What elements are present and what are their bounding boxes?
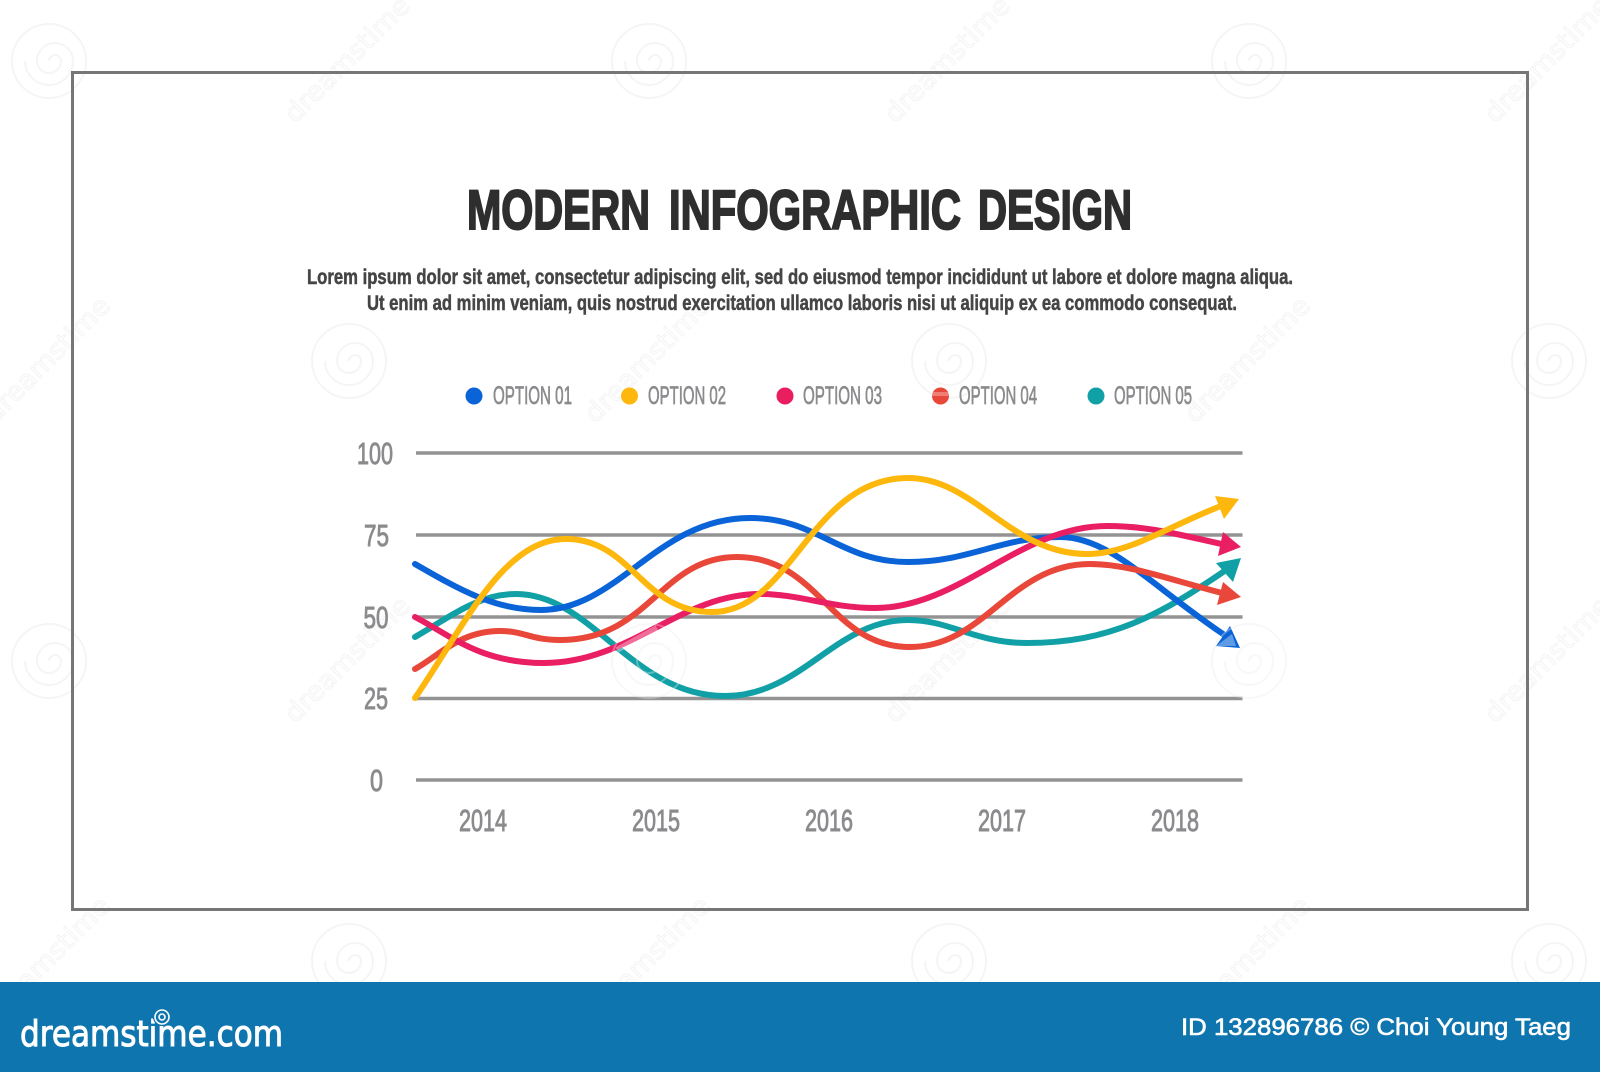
text: dreamstime: [1179, 891, 1317, 1029]
text: dreamstime: [279, 0, 417, 129]
legend item: option 04: OPTION 04: [959, 382, 1037, 410]
y axis labels: 100: [357, 436, 393, 471]
legend item: option 05: OPTION 05: [1114, 382, 1192, 410]
title: DESIGN: [978, 178, 1132, 241]
series: option 04 red line with arrow: [415, 557, 1241, 669]
legend item: option 02: OPTION 02: [648, 382, 726, 410]
text: dreamstime: [879, 591, 1017, 729]
x axis labels: 2016: [805, 803, 853, 838]
x axis labels: 2014: [459, 803, 507, 838]
series: option 05 teal line with arrow: [415, 558, 1241, 696]
y axis labels: 75: [364, 518, 389, 553]
icon: spiral logo: [153, 1008, 171, 1026]
legend item: option 04: [932, 382, 1037, 410]
legend item: option 03: OPTION 03: [803, 382, 882, 410]
line chart: [357, 436, 1242, 838]
legend item: option 01: [466, 382, 572, 410]
x axis labels: 2015: [632, 803, 680, 838]
credit text: ID 132896786 © Choi Young Taeg: [1181, 1014, 1571, 1041]
logo text: dreamstime.com: [20, 1014, 283, 1055]
y axis labels: 0: [370, 763, 383, 798]
x axis labels: 2018: [1151, 803, 1199, 838]
text: dreamstime: [879, 0, 1017, 129]
legend item: option 01: OPTION 01: [493, 382, 572, 410]
text: dreamstime: [1179, 291, 1317, 429]
footer bar: [0, 982, 1600, 1072]
series: option 01 blue line with arrow: [415, 518, 1240, 648]
text block: description: Ut enim ad minim veniam, quis nostrud exercitation ullamco laboris nisi ut aliquip ex ea commodo consequat.: [367, 292, 1237, 315]
series: option 02 yellow line with arrow: [415, 478, 1239, 698]
text: dreamstime: [279, 591, 417, 729]
y axis labels: 50: [364, 600, 388, 635]
title: INFOGRAPHIC: [669, 178, 961, 241]
text: dreamstime: [579, 291, 717, 429]
y axis labels: [357, 436, 393, 798]
legend item: option 05: [1088, 382, 1192, 410]
legend item: option 02: [621, 382, 726, 410]
y axis labels: 25: [364, 681, 388, 716]
legend: [466, 382, 1192, 410]
text: dreamstime: [579, 891, 717, 1029]
text block: description: Lorem ipsum dolor sit amet, consectetur adipiscing elit, sed do eiusmod tempor incididunt ut labore et dolore magna aliqua.: [307, 266, 1293, 289]
title: [467, 178, 1132, 241]
x axis labels: [459, 803, 1199, 838]
x axis labels: 2017: [978, 803, 1026, 838]
panel: chart frame: [72, 72, 1528, 910]
text block: description: [307, 266, 1293, 315]
series: option 03 pink line with arrow: [415, 526, 1241, 663]
title: MODERN: [467, 178, 650, 241]
legend item: option 03: [776, 382, 882, 410]
